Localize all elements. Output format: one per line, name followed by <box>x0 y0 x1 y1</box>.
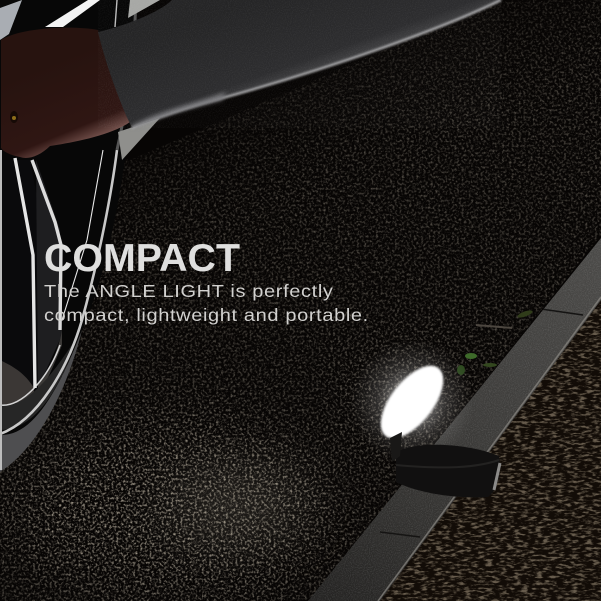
sleeve <box>98 0 501 128</box>
title: COMPACT <box>44 237 240 280</box>
hand <box>1 28 130 158</box>
angle light: glow, lens and base <box>350 340 500 497</box>
description text: compact, lightweight and portable. <box>44 304 369 324</box>
description text <box>44 281 369 324</box>
upper rim details <box>45 0 100 27</box>
car wheel <box>0 0 160 472</box>
description text: The ANGLE LIGHT is perfectly <box>44 281 334 301</box>
spokes <box>15 158 35 388</box>
weeds beside kerb <box>457 309 533 375</box>
dirt verge <box>380 300 601 601</box>
kerb <box>308 238 601 601</box>
